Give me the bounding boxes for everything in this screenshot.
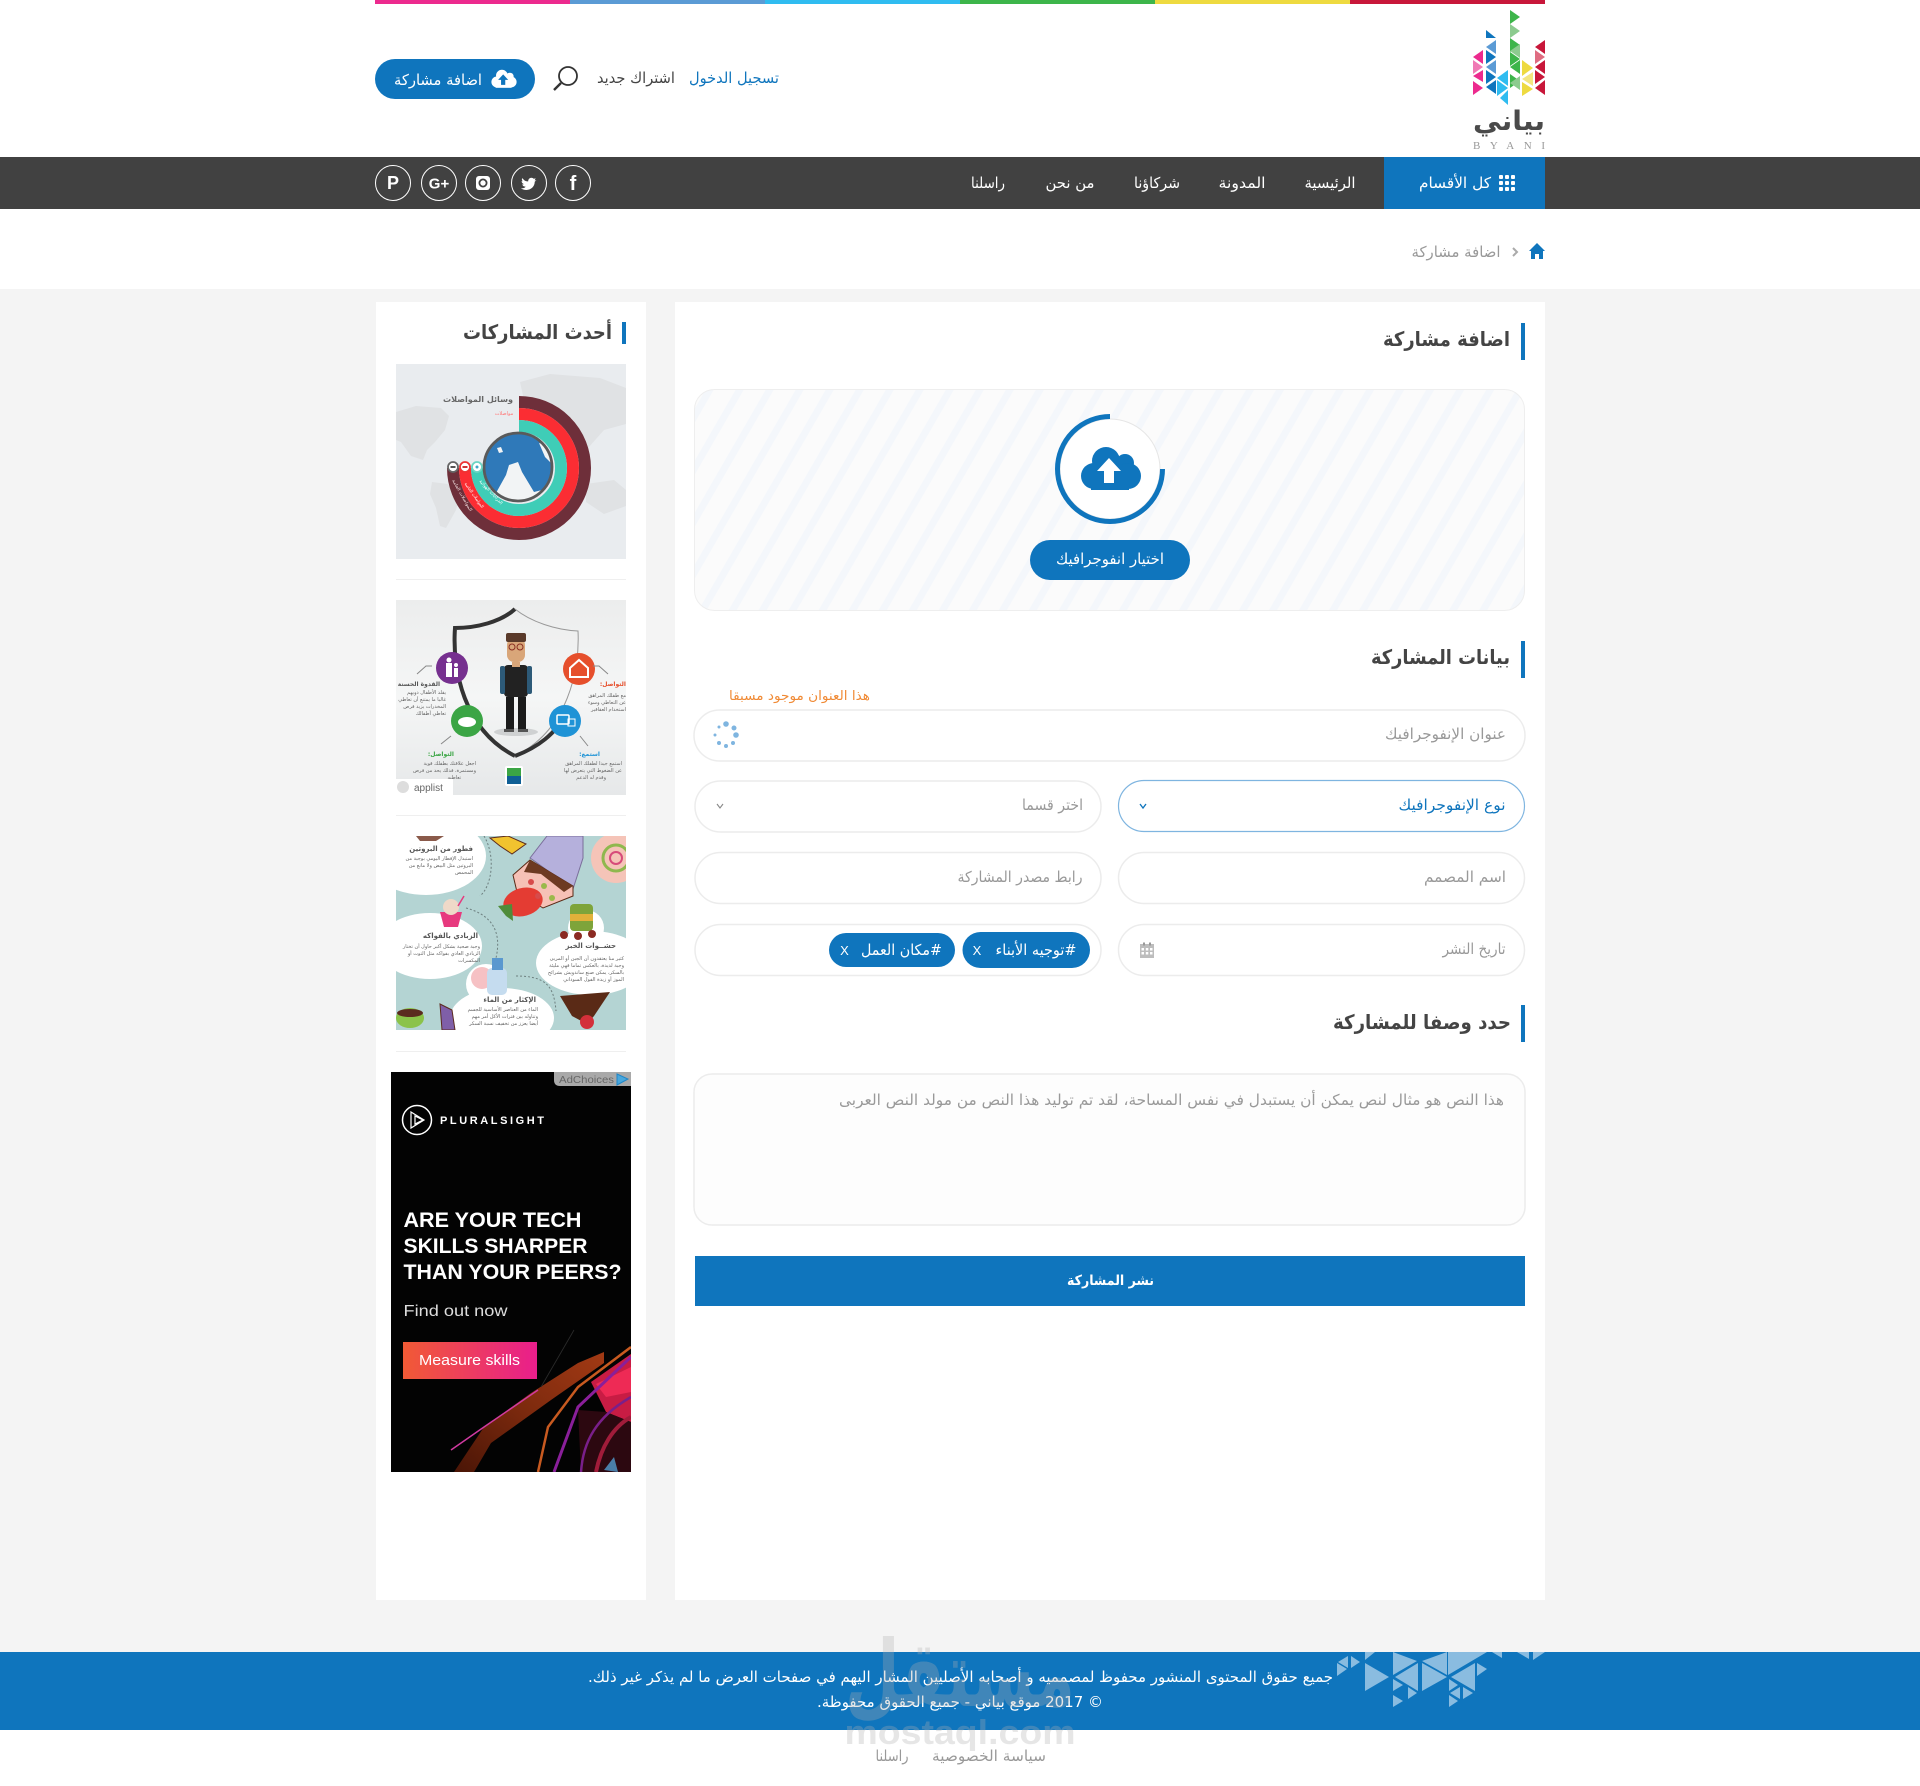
heading: add post bbox=[1383, 323, 1525, 360]
thumbnail: healthy food infographic: وجبة لذيذة، بالعكس تماما فهي مليئة bbox=[549, 963, 625, 969]
thumbnail: parenting infographic bbox=[396, 600, 626, 795]
thumbnail: transport infographic: وسائل المواصلات bbox=[443, 395, 513, 404]
footer links: راسلنا bbox=[876, 1747, 908, 1765]
ad subtext: Find out now bbox=[404, 1303, 508, 1320]
thumbnail: healthy food infographic: أيضا يعزز من تخفيف نسبة السكر bbox=[468, 1020, 539, 1027]
icon: all categories grid bbox=[1499, 175, 1515, 191]
heading: post data: بيانات المشاركة bbox=[1371, 645, 1510, 669]
logo: Byani bbox=[1473, 10, 1545, 152]
validation message: هذا العنوان موجود مسبقا bbox=[729, 689, 870, 704]
footer links: سياسة الخصوصية bbox=[932, 1747, 1046, 1765]
header button: add post: اضافة مشاركة bbox=[394, 71, 482, 89]
button: choose infographic: اختيار انفوجرافيك bbox=[1056, 550, 1164, 568]
breadcrumb bbox=[1412, 243, 1545, 261]
icon: upload circle bbox=[1058, 416, 1162, 522]
thumbnail: healthy food infographic: المحمص bbox=[455, 870, 473, 876]
thumbnail: parenting infographic: يقلد الأطفال ذويهم bbox=[407, 689, 447, 696]
icon: loading spinner bbox=[714, 721, 739, 748]
thumbnail: healthy food infographic: الزبادي العادي بفواكه مثل التوت أو bbox=[407, 950, 480, 957]
ad choices tag bbox=[554, 1072, 631, 1086]
breadcrumb: اضافة مشاركة bbox=[1412, 243, 1500, 261]
footer band bbox=[0, 1652, 1920, 1730]
thumbnail: healthy food infographic: بالسكر، يمكن صنع ساندويش بشرائح bbox=[548, 970, 624, 976]
heading: post description bbox=[1333, 1005, 1525, 1042]
logo: Byani: BYANI bbox=[1473, 140, 1545, 152]
ad logo bbox=[402, 1106, 544, 1134]
button: publish post: نشر المشاركة bbox=[1067, 1273, 1154, 1289]
footer links bbox=[876, 1747, 1046, 1765]
heading: add post: اضافة مشاركة bbox=[1383, 327, 1510, 351]
button: choose infographic bbox=[1030, 540, 1190, 580]
link: log in: تسجيل الدخول bbox=[689, 69, 779, 87]
thumbnail: healthy food infographic: الزبادي بالفواكه bbox=[423, 932, 478, 940]
social icons: P bbox=[387, 173, 399, 193]
thumbnail: parenting infographic: ومستمرة، فذلك يحد من فرص bbox=[413, 768, 477, 774]
thumbnail: healthy food infographic: فطور من البروتين bbox=[409, 845, 473, 853]
navigation bar bbox=[0, 157, 1920, 209]
icon: search bbox=[554, 67, 577, 90]
divider bbox=[396, 815, 626, 816]
select: category bbox=[695, 781, 1101, 832]
select: category: اختر قسما bbox=[1022, 796, 1083, 814]
ad button: Measure skills bbox=[419, 1352, 520, 1369]
watermark: mostaql: mostaql.com bbox=[844, 1714, 1076, 1752]
panel: latest posts sidebar bbox=[366, 302, 646, 1600]
thumbnail: transport infographic: الدراجات الهوائية bbox=[478, 479, 503, 506]
thumbnail: parenting infographic: مع طفلك المراهق bbox=[588, 693, 626, 699]
input: publish date: تاريخ النشر bbox=[1442, 940, 1506, 958]
thumbnail: transport infographic: المواصلات العامة bbox=[450, 479, 473, 513]
footer copyright text bbox=[588, 1667, 1333, 1712]
navigation bar: الرئيسية bbox=[1304, 174, 1356, 192]
ad headline: THAN YOUR PEERS? bbox=[404, 1261, 622, 1284]
input: designer name: اسم المصمم bbox=[1424, 868, 1506, 886]
thumbnail: parenting infographic: التواصل: bbox=[600, 681, 626, 688]
input: infographic title: عنوان الإنفوجرافيك bbox=[1385, 725, 1506, 743]
page background bbox=[0, 289, 1920, 1652]
input: designer name bbox=[1118, 852, 1524, 904]
thumbnail: healthy food infographic: استبدل الإفطار اليومي بوجبة من bbox=[406, 856, 473, 862]
thumbnail: parenting infographic: استخدام العقاقير bbox=[590, 707, 626, 713]
advertisement: Pluralsight bbox=[391, 1072, 631, 1472]
ad logo: PLURALSIGHT bbox=[440, 1115, 544, 1127]
input: source link: رابط مصدر المشاركة bbox=[958, 868, 1082, 886]
thumbnail: healthy food infographic: الموز أو زبدة الفول السوداني bbox=[563, 976, 624, 983]
footer copyright text: جميع حقوق المحتوى المنشور محفوظ لمصمميه و أصحابه الأصليين المشار اليهم في صفحات العرض ما لم يذكر غير ذلك. bbox=[588, 1667, 1333, 1687]
icon: calendar bbox=[1140, 942, 1154, 958]
thumbnail: parenting infographic: تعاطيه bbox=[448, 775, 462, 781]
navigation bar: كل الأقسام bbox=[1419, 173, 1492, 192]
divider bbox=[396, 1051, 626, 1052]
tag: children guidance: #توجيه الأبناء bbox=[996, 940, 1076, 959]
tag: workplace: X bbox=[840, 943, 849, 958]
select: infographic type: نوع الإنفوجرافيك bbox=[1398, 796, 1506, 814]
social icons: f bbox=[570, 173, 577, 195]
thumbnail: parenting infographic: وقدم له الدعم bbox=[576, 775, 607, 781]
ad artwork bbox=[451, 1330, 631, 1472]
heading: latest posts: أحدث المشاركات bbox=[463, 318, 612, 344]
watermark: mostaql: مستقل bbox=[845, 1621, 1075, 1728]
thumbnail: parenting infographic: استمع: bbox=[579, 751, 600, 758]
logo: Byani: بياني bbox=[1473, 106, 1545, 137]
thumbnail: healthy food infographic: حشــوات الخبز bbox=[564, 942, 616, 950]
thumbnail: parenting infographic: القدوة الحسنة bbox=[398, 681, 440, 688]
thumbnail: parenting infographic: تعاطي أطفالك bbox=[416, 710, 447, 717]
thumbnail: healthy food infographic: كثير منا يعتقدون أن الجبن أو المربى bbox=[550, 955, 625, 962]
heading: post data bbox=[1371, 641, 1525, 678]
thumbnail: parenting infographic: غالبا ما يمتنع أن تعاطي bbox=[398, 696, 446, 703]
thumbnail: healthy food infographic bbox=[396, 836, 626, 1030]
button: publish post bbox=[695, 1256, 1525, 1306]
navigation bar: من نحن bbox=[1046, 174, 1094, 192]
divider bbox=[396, 579, 626, 580]
thumbnail: parenting infographic: applist bbox=[414, 783, 443, 794]
social icons: G+ bbox=[429, 176, 449, 192]
thumbnail: parenting infographic: التواصل: bbox=[428, 751, 454, 758]
thumbnail: healthy food infographic: الماء من العناصر الأساسية للجسم bbox=[468, 1006, 538, 1013]
tag: children guidance: X bbox=[973, 943, 982, 958]
input: tags bbox=[695, 924, 1101, 976]
upload drop area bbox=[694, 390, 1524, 610]
header: top colour stripe bbox=[375, 0, 1545, 4]
select: infographic type bbox=[1118, 780, 1524, 832]
heading: post description: حدد وصفا للمشاركة bbox=[1333, 1010, 1511, 1034]
footer triangle pattern bbox=[1337, 1652, 1545, 1707]
thumbnail: parenting infographic: عن التعاطي وسوء bbox=[588, 700, 626, 706]
ad button bbox=[403, 1342, 537, 1379]
thumbnail: transport infographic bbox=[396, 364, 626, 559]
navigation bar: المدونة bbox=[1218, 174, 1266, 192]
watermark: mostaql bbox=[844, 1621, 1076, 1752]
input: publish date bbox=[1118, 924, 1524, 976]
textarea: description: هذا النص هو مثال لنص يمكن أن يستبدل في نفس المساحة، لقد تم توليد هذا النص من مولد النص العربى bbox=[839, 1090, 1504, 1110]
input: infographic title bbox=[694, 710, 1525, 761]
thumbnail: healthy food infographic: البروتين مثل البيض ولا مانع من bbox=[409, 863, 473, 869]
thumbnail: healthy food infographic: وجبة صحية بشكل أكبر حاول أن تختار bbox=[402, 943, 481, 950]
link: new subscription: اشتراك جديد bbox=[597, 69, 675, 87]
thumbnail: healthy food infographic: الإكثار من الماء bbox=[483, 996, 536, 1004]
navigation bar: راسلنا bbox=[971, 174, 1005, 192]
thumbnail: parenting infographic: اجعل علاقتك بطفلك قوية bbox=[424, 761, 476, 767]
thumbnail: healthy food infographic: وتناوله بين فترات الأكل أمر مهم bbox=[472, 1013, 539, 1020]
tag: children guidance bbox=[962, 932, 1090, 968]
ad choices tag: AdChoices bbox=[559, 1074, 614, 1086]
navigation bar: شركاؤنا bbox=[1134, 174, 1180, 192]
footer copyright text: © 2017 موقع بياني - جميع الحقوق محفوظة. bbox=[817, 1693, 1103, 1712]
header button: add post bbox=[375, 59, 535, 99]
ad headline: SKILLS SHARPER bbox=[404, 1235, 587, 1258]
input: source link bbox=[695, 852, 1101, 904]
tag: workplace: #مكان العمل bbox=[861, 941, 942, 959]
tag: workplace bbox=[829, 933, 955, 967]
social icons bbox=[376, 166, 590, 200]
panel: add post form bbox=[675, 302, 1545, 1600]
thumbnail: transport infographic: مواصلات bbox=[495, 411, 514, 417]
thumbnail: parenting infographic: المخدرات يزيد فرص bbox=[403, 704, 446, 710]
ad headline bbox=[404, 1209, 622, 1284]
ad headline: ARE YOUR TECH bbox=[404, 1209, 582, 1232]
thumbnail: transport infographic: المواصلات الخاصة bbox=[463, 482, 484, 509]
thumbnail: parenting infographic: عن الضغوط التي يتعرض لها bbox=[564, 768, 622, 774]
thumbnail: parenting infographic: استمع جيدا لطفلك المراهق bbox=[565, 761, 622, 767]
textarea: description bbox=[694, 1074, 1525, 1225]
thumbnail: healthy food infographic: المكسرات bbox=[458, 958, 480, 964]
